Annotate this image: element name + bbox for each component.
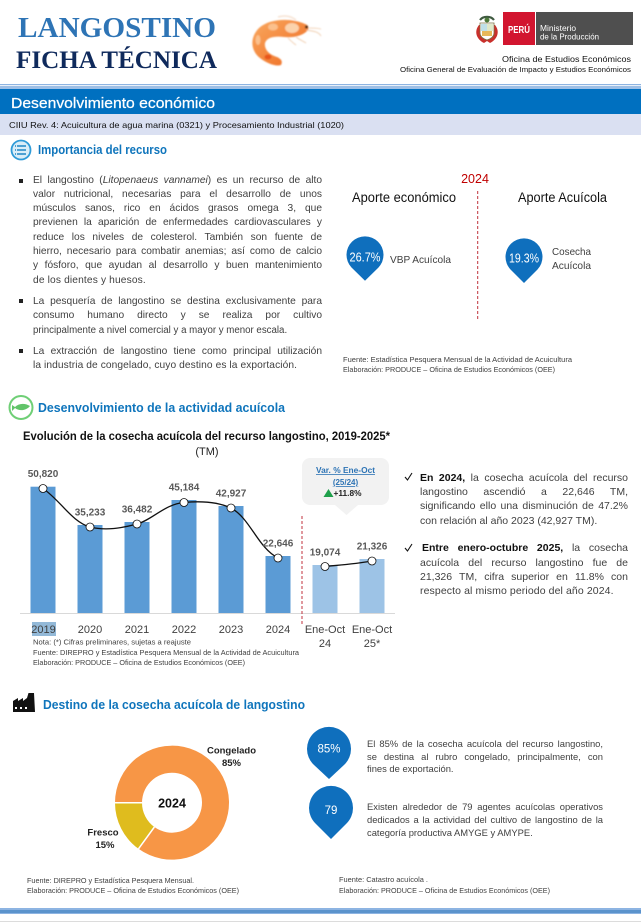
source note: catastro: Fuente: Catastro acuícola . xyxy=(339,875,428,884)
label: VBP Acuícola: VBP Acuícola xyxy=(390,254,451,266)
icon: green fish xyxy=(10,396,32,419)
chart title: (TM) xyxy=(195,446,219,458)
source note: donut: Fuente: DIREPRO y Estadística Pesquera Mensual. xyxy=(27,876,194,885)
donut chart: destination xyxy=(87,746,256,860)
text block: importance of the resource: La pesquería de langostino se destina exclusivamente para xyxy=(33,296,322,306)
label: Fresco xyxy=(87,828,119,851)
slice: Fresco 15% xyxy=(115,803,154,849)
value labels: 35,233 xyxy=(75,508,106,518)
text block: 2024 harvest: con relación al año 2023 (42,927 TM). xyxy=(420,514,597,526)
callout: Var. % Ene-Oct xyxy=(302,458,389,515)
sub-banner: CIIU xyxy=(0,114,641,135)
source note: donut: Elaboración: PRODUCE – Oficina de Estudios Económicos (OEE) xyxy=(27,886,239,895)
text block: Jan-Oct 2025 harvest: Entre enero-octubre 2025, la cosecha xyxy=(422,542,628,554)
chart title: Evolución de la cosecha acuícola del recurso langostino, 2019-2025* xyxy=(23,431,391,443)
year in centre: 2024 xyxy=(158,796,186,810)
bar chart: harvest xyxy=(20,469,395,650)
axis labels: 25* xyxy=(364,638,381,650)
label: Congelado xyxy=(207,746,256,769)
source note: chart: Elaboración: PRODUCE – Oficina de Estudios Económicos (OEE) xyxy=(33,658,245,667)
pin: 85% xyxy=(307,727,351,779)
text block: importance of the resource: y fósforo, que ayudan al desarrollo y buen mantenimiento xyxy=(33,260,322,271)
bars xyxy=(30,487,384,613)
value labels: 19,074 xyxy=(310,548,341,558)
title: Langostino Ficha Técnica xyxy=(16,12,217,74)
slice: Congelado 85% xyxy=(115,746,229,860)
callout: Var. % Ene-Oct: Var. % Ene-Oct xyxy=(316,466,375,475)
text block: 2024 harvest: significando ello una disminución de 47.2% xyxy=(420,500,628,512)
pin: 85%: 85% xyxy=(317,744,341,756)
banner: Desenvolvimiento económico: Desenvolvimiento económico xyxy=(11,95,215,112)
text block: Jan-Oct 2025 harvest xyxy=(420,542,628,597)
banner: Desenvolvimiento económico xyxy=(0,89,641,114)
text block: 85%: se destina al rubro congelado, principalmente, con xyxy=(367,751,603,762)
text block: 79 agents: dedicados a la actividad del cultivo de langostino de la xyxy=(367,814,603,825)
axis labels: 2021 xyxy=(125,624,149,636)
year label: 2024 xyxy=(461,172,489,186)
value labels: 21,326 xyxy=(357,542,388,552)
text block: 79 agents xyxy=(367,801,603,838)
axis labels xyxy=(31,622,392,650)
office names: Oficina General de Evaluación de Impacto y Estudios Económicos xyxy=(400,65,631,74)
text block: Jan-Oct 2025 harvest: respecto al mismo periodo del año 2024. xyxy=(420,585,614,597)
source note: catastro xyxy=(339,875,550,895)
label: Fresco: Fresco xyxy=(87,828,119,838)
pin: 79: 79 xyxy=(325,805,337,817)
source note: Elaboración: PRODUCE – Oficina de Estudios Económicos (OEE) xyxy=(343,365,555,374)
text block: importance of the resource: principalmente a nivel comercial y a mayor y menor escala. xyxy=(33,324,287,336)
source note: chart: Nota: (*) Cifras preliminares, sujetas a reajuste xyxy=(33,638,191,646)
chart title xyxy=(23,431,391,458)
source note: Fuente: Estadística Pesquera Mensual de la Actividad de Acuicultura xyxy=(343,355,573,364)
office names: Oficina de Estudios Económicos xyxy=(502,54,631,64)
label: Fresco: 15% xyxy=(95,840,115,851)
text block: 85%: fines de exportación. xyxy=(367,763,454,774)
pin: 26.7% xyxy=(346,236,383,281)
label: Cosecha Acuícola: Acuícola xyxy=(552,260,591,272)
text block: 85% xyxy=(367,738,603,774)
label: Cosecha Acuícola: Cosecha xyxy=(552,246,591,258)
logo: Ministerio de la Producción: PERÚ xyxy=(508,23,530,36)
axis labels: Ene-Oct xyxy=(305,624,345,636)
label: Congelado: Congelado xyxy=(207,746,256,756)
source note: catastro: Elaboración: PRODUCE – Oficina de Estudios Económicos (OEE) xyxy=(339,886,550,895)
callout: Var. % Ene-Oct: (25/24) xyxy=(333,478,359,487)
text block: importance of the resource: de los dientes y huesos. xyxy=(33,274,146,286)
office names xyxy=(400,54,631,74)
text block: importance of the resource: valor nutricional, necesarias para el desarrollo de unos xyxy=(33,189,322,200)
text block: 85%: El 85% de la cosecha acuícola del recurso langostino, xyxy=(367,738,603,749)
source note: chart xyxy=(33,638,300,667)
source note: donut xyxy=(27,876,239,895)
text block: importance of the resource: El langostino (Litopenaeus vannamei) es un recurso de alto xyxy=(33,174,322,186)
panel: 2024 contribution xyxy=(343,172,607,374)
pin: 19.3%: 19.3% xyxy=(509,252,539,266)
axis labels: 24 xyxy=(319,638,331,650)
trend line xyxy=(43,488,278,558)
logo: Ministerio de la Producción: de la Producción xyxy=(540,32,599,42)
source note: chart: Fuente: DIREPRO y Estadística Pesquera Mensual de la Actividad de Acuicultura xyxy=(33,648,300,657)
text block: 2024 harvest: En 2024, la cosecha acuícola del recurso xyxy=(420,472,628,484)
logo: Ministerio de la Producción: Ministerio xyxy=(540,24,577,33)
label: Congelado: 85% xyxy=(222,758,242,769)
icon: check mark 2024 xyxy=(405,473,412,480)
text block: importance of the resource: hierro, necesario para combatir anemias; así como de calcio xyxy=(33,246,322,257)
text block: importance of the resource: La extracción de langostino tiene como principal utilización xyxy=(33,346,322,356)
text block: Jan-Oct 2025 harvest: acuícola del recurso langostino fue de xyxy=(420,556,628,568)
logo: Ministerio de la Producción xyxy=(503,12,633,45)
heading: Desenvolvimiento de la actividad acuícola: Desenvolvimiento de la actividad acuícola xyxy=(38,400,286,415)
value labels: 50,820 xyxy=(28,469,59,480)
title: Langostino Ficha Técnica: LANGOSTINO xyxy=(18,12,216,44)
axis labels: 2019 xyxy=(31,624,56,636)
heading: Importancia del recurso: Importancia del recurso xyxy=(38,142,167,157)
axis labels: 2022 xyxy=(172,624,196,636)
source note xyxy=(343,355,573,374)
icon: factory xyxy=(13,693,35,712)
icon: shrimp xyxy=(252,16,321,66)
text block: 2024 harvest xyxy=(420,472,628,526)
heading: Aporte económico: Aporte económico xyxy=(352,190,456,205)
pin: 26.7%: 26.7% xyxy=(350,250,380,264)
axis labels: Ene-Oct xyxy=(352,624,392,636)
axis labels: 2020 xyxy=(78,624,102,636)
axis labels: 2024 xyxy=(266,624,290,636)
icon: Peruvian coat of arms xyxy=(476,17,498,43)
text block: importance of the resource: la industria de congelado, cuyo destino es la exportación. xyxy=(33,360,297,370)
heading: Aporte Acuícola: Aporte Acuícola xyxy=(518,190,607,205)
value labels: 42,927 xyxy=(216,488,247,500)
pin: 79 xyxy=(309,786,353,839)
markers xyxy=(39,484,376,570)
text block: importance of the resource xyxy=(19,174,322,370)
value labels: 36,482 xyxy=(122,504,153,516)
value labels xyxy=(28,469,388,558)
title: Langostino Ficha Técnica: FICHA TÉCNICA xyxy=(16,46,217,74)
text block: 79 agents: categoría productiva AMYGE y AMYPE. xyxy=(367,827,533,838)
axis labels: 2023 xyxy=(219,624,243,636)
icon: check mark 2025 xyxy=(405,544,412,551)
callout: Var. % Ene-Oct: +11.8% xyxy=(334,489,362,498)
heading: Destino de la cosecha: Destino de la cosecha acuícola de langostino xyxy=(43,697,305,712)
text block: Jan-Oct 2025 harvest: 21,326 TM, cifra superior en 11.8% con xyxy=(420,570,628,582)
icon: list xyxy=(12,140,30,160)
value labels: 45,184 xyxy=(169,482,200,494)
text block: importance of the resource: músculos sanos, rico en ácidos grasos omega 3, que xyxy=(33,203,322,214)
sub-banner: CIIU: CIIU Rev. 4: Acuicultura de agua marina (0321) y Procesamiento Industrial (1020) xyxy=(9,120,344,130)
pin: 19.3% xyxy=(506,238,542,283)
text block: importance of the resource: reduce los niveles de colesterol. También son fuente de xyxy=(33,232,322,243)
label: Cosecha Acuícola xyxy=(552,246,591,272)
text block: 2024 harvest: langostino ascendió a 22,646 TM, xyxy=(420,486,628,498)
text block: importance of the resource: consumo humano directo y se realiza por cultivo xyxy=(33,310,322,320)
value labels: 22,646 xyxy=(263,538,294,550)
text block: importance of the resource: previenen la aparición de enfermedades cardiovasculares y xyxy=(33,217,322,228)
text block: 79 agents: Existen alrededor de 79 agentes acuícolas operativos xyxy=(367,801,603,812)
